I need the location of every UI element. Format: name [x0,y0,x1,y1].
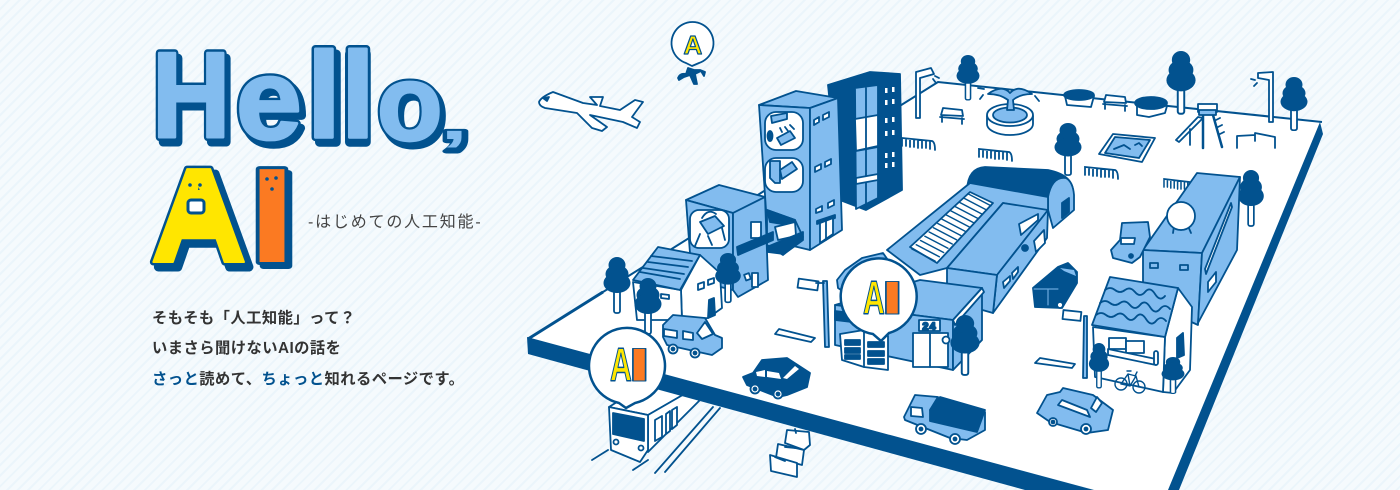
vending machines [840,330,888,370]
text block: intro: そもそも「人工知能」って？ [152,309,356,327]
train tracks [592,407,720,473]
title word: Hello,: , [440,90,468,151]
playground slide [1176,104,1224,148]
bubble letter A: A [684,30,702,60]
icon: A and I characters: A [863,272,885,325]
icon: A and I characters [863,272,905,325]
house left [633,247,722,320]
blue car [1037,388,1113,434]
tree by store [950,315,980,375]
bicycle [1115,371,1145,393]
title word: AI: A [150,140,248,291]
small truck near buildings [767,210,803,255]
title word: Hello,: H [156,32,234,168]
title word: AI: I [248,140,296,291]
title word: Hello,: e [236,36,302,164]
drone [678,68,705,84]
platform [527,82,1323,490]
bubble [671,22,713,66]
blue van [663,315,722,358]
title word: AI: I [248,140,296,291]
text block: intro: いまさら聞けないAIの話を [152,340,341,357]
title word: Hello,: o [381,47,446,167]
fountain [978,88,1039,135]
street lamp right [1063,310,1087,378]
fences [902,138,1192,191]
convenience store [835,280,984,370]
icon: A and I characters: I [627,339,652,392]
convenience store: 24 [922,321,937,333]
dark tower building [828,72,902,210]
train [609,375,705,462]
speech bubble: store [841,258,917,341]
trees in park [957,51,1308,226]
cardboard boxes [770,429,810,477]
title word: AI: I [252,144,300,295]
title word: Hello,: o [377,43,443,163]
benches [940,95,1127,124]
street lamp left [798,279,829,347]
title word: Hello,: ll [307,27,375,163]
dark car [743,358,810,398]
title word: AI: A [150,140,248,291]
platform back edges [528,82,1322,339]
left trees [604,253,741,334]
title word: Hello,: ll [311,32,375,168]
car under convenience store bubble [837,253,895,296]
dark van on road [1033,263,1077,308]
title word: Hello,: e [240,40,306,168]
big blue building right [1143,173,1240,325]
street lamp back right [1251,72,1273,122]
long central building with arched roof [887,167,1074,313]
title word: Hello,: H [152,27,230,163]
platform front side [527,337,1094,490]
title word: Hello,: o [377,43,443,163]
icon: airplane [539,92,643,131]
title: Hello, AI [150,27,473,296]
text block: intro [152,309,464,388]
title word: Hello,: ll [307,27,375,163]
title word: Hello,: , [438,81,473,156]
title word: Hello, [152,27,473,168]
subtitle: -はじめての人工知能- [308,213,482,231]
speech bubble: train [589,328,665,408]
street lamp back left [916,68,939,118]
title word: AI: A [155,145,252,296]
platform right side [1168,122,1323,490]
crosswalk marks [775,329,1075,368]
truck [904,395,985,444]
house trees [1089,343,1184,393]
text block: intro: さっと読めて、ちょっと知れるページです。 [152,370,464,388]
icon: A and I characters: A [610,339,632,392]
title word: Hello,: H [152,27,230,163]
iron bars [1237,133,1275,148]
icon: A and I characters [610,339,652,392]
small car right [1111,222,1150,263]
title word: AI [150,140,300,296]
icon: A and I characters: I [880,272,905,325]
title word: Hello,: e [236,36,302,164]
small office building [686,185,773,297]
drone with speech bubble [671,22,713,84]
sandbox [1099,134,1155,162]
planters [1064,90,1167,117]
platform top [528,82,1322,490]
house right [1092,277,1192,393]
tall blue building [759,91,842,250]
